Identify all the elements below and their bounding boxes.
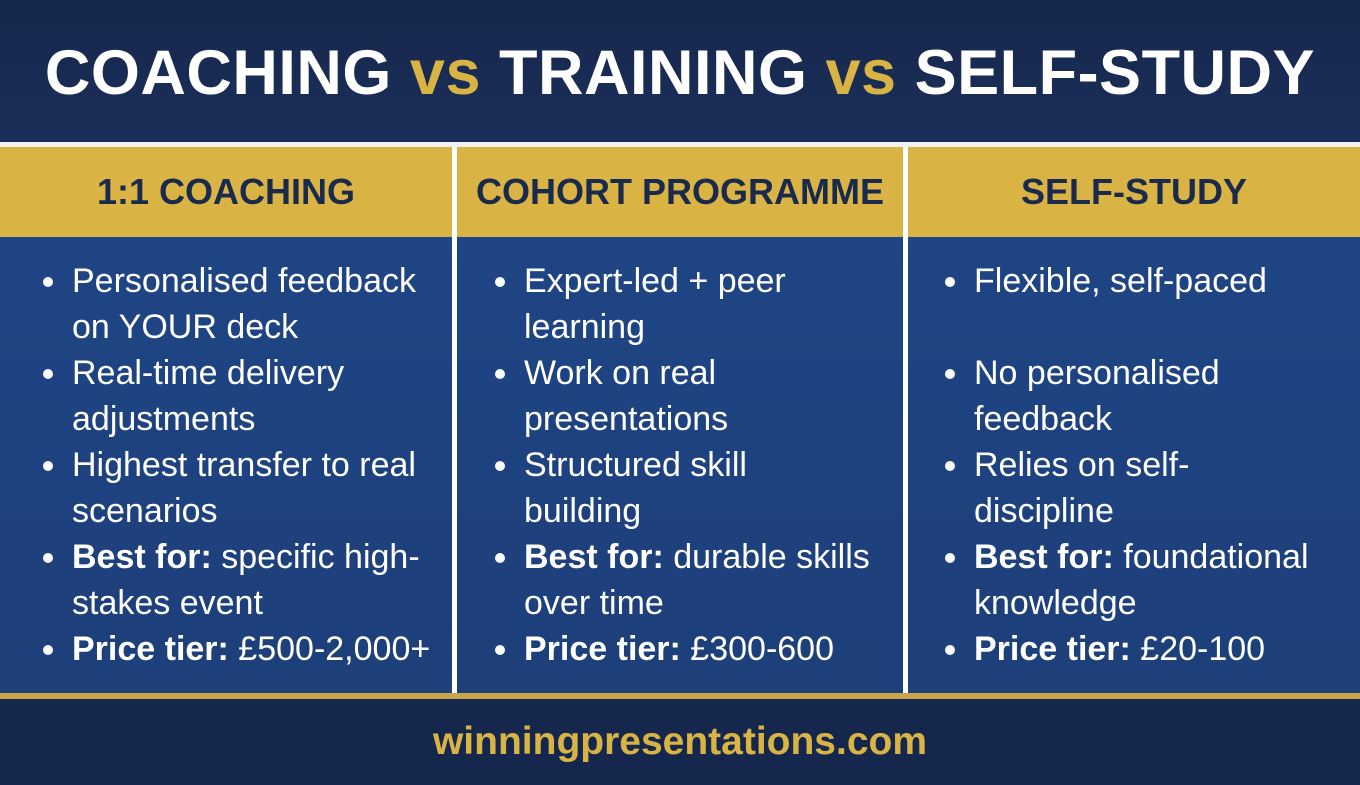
header: self-study (908, 147, 1360, 237)
list: cohort: over time (524, 584, 664, 622)
list: cohort: Price tier: £300-600 (524, 630, 834, 668)
header: cohort programme: COHORT PROGRAMME (476, 171, 884, 212)
list: cohort: Work on real (524, 354, 716, 392)
list: cohort: Structured skill (524, 446, 747, 484)
list: coaching: scenarios (72, 492, 218, 530)
panel: coaching (0, 237, 452, 693)
list: coaching: Real-time delivery (72, 354, 344, 392)
list: cohort (495, 262, 870, 668)
header: 1:1 coaching: 1:1 COACHING (97, 171, 355, 212)
title (0, 0, 1360, 142)
list: cohort: presentations (524, 400, 728, 438)
list: self-study: discipline (974, 492, 1114, 530)
list: cohort: learning (524, 308, 645, 346)
header: self-study: SELF-STUDY (1021, 171, 1247, 212)
list: self-study: Relies on self- (974, 446, 1189, 484)
list: cohort: Expert-led + peer (524, 262, 786, 300)
list: cohort: Best for: durable skills (524, 538, 870, 576)
list: coaching: Personalised feedback (72, 262, 416, 300)
list: self-study (945, 262, 1309, 668)
footer: website: winningpresentations.com (433, 720, 927, 763)
list: self-study: Best for: foundational (974, 538, 1309, 576)
list: coaching: Best for: specific high- (72, 538, 420, 576)
panel: cohort (457, 237, 903, 693)
title: COACHING vs TRAINING vs SELF-STUDY (45, 38, 1315, 108)
footer: website (0, 699, 1360, 784)
list: coaching (43, 262, 430, 668)
list: coaching: Highest transfer to real (72, 446, 416, 484)
header: cohort programme (457, 147, 903, 237)
list: coaching: stakes event (72, 584, 263, 622)
list: coaching: adjustments (72, 400, 255, 438)
list: self-study: Price tier: £20-100 (974, 630, 1265, 668)
header: 1:1 coaching (0, 147, 452, 237)
list: self-study: feedback (974, 400, 1112, 438)
list: self-study: Flexible, self-paced (974, 262, 1267, 300)
list: coaching: Price tier: £500-2,000+ (72, 630, 430, 668)
list: self-study: knowledge (974, 584, 1137, 622)
list: cohort: building (524, 492, 641, 530)
list: coaching: on YOUR deck (72, 308, 298, 346)
list: self-study: No personalised (974, 354, 1220, 392)
panel: self-study (908, 237, 1360, 693)
